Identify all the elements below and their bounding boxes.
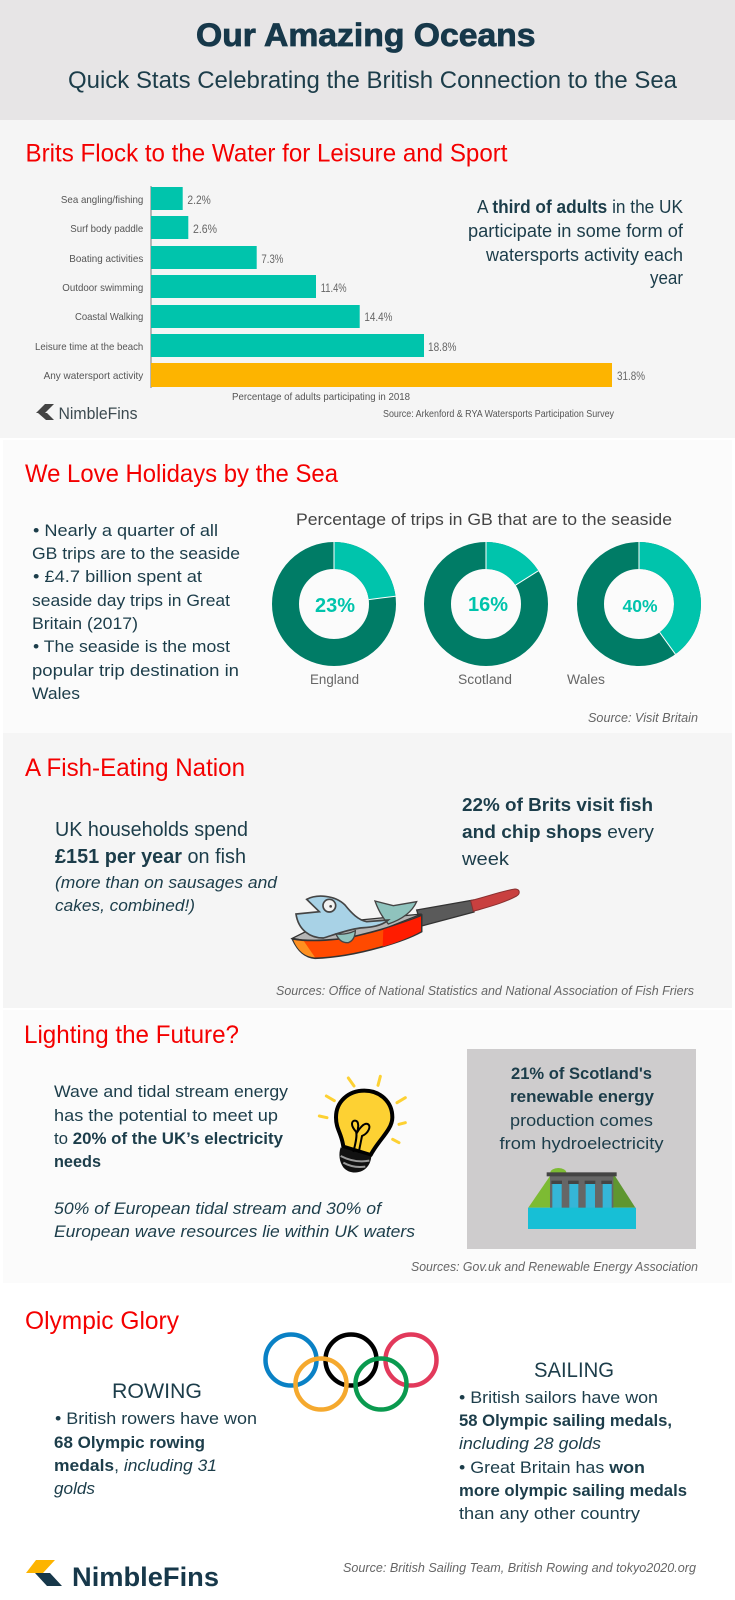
text: wave and tidal energy: European wave resources lie within UK waters (54, 1222, 416, 1241)
callout: a third of adults: participate in some form of (468, 221, 684, 241)
bar chart: Any watersport activity (44, 370, 144, 382)
callout box: hydroelectricity: 21% of Scotland's (511, 1064, 652, 1083)
bar chart: 7.3% (261, 254, 283, 266)
text: household spend: (more than on sausages and (55, 873, 278, 892)
donut chart: Wales (567, 542, 688, 687)
text: wave and tidal energy: needs (54, 1152, 101, 1171)
bullet list: Britain (2017) (32, 614, 138, 633)
text: wave and tidal energy: has the potential to meet up (54, 1106, 278, 1125)
bar chart: 11.4% (321, 283, 347, 295)
panel: lighting the future (3, 1010, 732, 1283)
bar chart (35, 186, 645, 403)
bullet list: popular trip destination in (32, 661, 239, 680)
bar chart: Coastal Walking (75, 311, 143, 323)
text: sailing: more olympic sailing medals (459, 1481, 687, 1500)
source: Sources: Gov.uk and Renewable Energy Association (411, 1260, 698, 1274)
bar chart: Surf body paddle (70, 223, 143, 235)
text: household spend: UK households spend (55, 819, 248, 841)
text: sailing: • Great Britain has won (459, 1458, 645, 1477)
text: rowing: ROWING (112, 1380, 202, 1403)
text: sailing: 58 Olympic sailing medals, (459, 1411, 672, 1430)
text: household spend: cakes, combined!) (55, 896, 195, 915)
heading: We Love Holidays by the Sea (25, 460, 338, 488)
heading: Olympic Glory (25, 1307, 179, 1335)
source: Source: Arkenford & RYA Watersports Participation Survey (383, 408, 615, 420)
donut chart: England (286, 542, 396, 687)
heading: A Fish-Eating Nation (25, 754, 245, 782)
bar chart: Sea angling/fishing (61, 194, 143, 206)
bar chart: 18.8% (428, 342, 456, 354)
bar chart: 2.6% (193, 224, 217, 236)
callout: a third of adults: watersports activity each (485, 245, 683, 265)
source: Sources: Office of National Statistics and National Association of Fish Friers (276, 984, 694, 998)
text: household spend (55, 819, 278, 915)
panel: olympic glory (25, 1307, 696, 1592)
text: sailing: • British sailors have won (459, 1388, 658, 1407)
callout box: hydroelectricity: production comes (510, 1111, 653, 1130)
text: rowing: 68 Olympic rowing (54, 1433, 205, 1452)
bullet list: • Nearly a quarter of all (33, 521, 218, 540)
logo: NimbleFins colour: NimbleFins (72, 1562, 219, 1592)
bar chart: Leisure time at the beach (35, 341, 143, 353)
donut chart: England: 23% (315, 595, 355, 617)
text: household spend: £151 per year on fish (55, 846, 246, 868)
text: rowing: medals, including 31 (54, 1456, 217, 1475)
icon: light bulb (319, 1076, 405, 1173)
bar chart: 2.2% (187, 195, 211, 207)
title: Our Amazing Oceans (196, 17, 536, 53)
text: sailing: SAILING (534, 1359, 614, 1382)
panel: holidays by the sea (3, 440, 732, 733)
bullet list: GB trips are to the seaside (32, 544, 240, 563)
heading: Brits Flock to the Water for Leisure and Sport (26, 140, 508, 168)
donut charts title: Percentage of trips in GB that are to the seaside (296, 510, 672, 529)
bullet list: • The seaside is the most (33, 637, 230, 656)
subtitle: Quick Stats Celebrating the British Connection to the Sea (68, 67, 678, 94)
callout box: hydroelectricity: renewable energy (510, 1087, 655, 1106)
text: fish and chip shops: and chip shops every (462, 821, 655, 842)
donut chart: Wales: Wales (567, 672, 605, 687)
callout: a third of adults: A third of adults in the UK (477, 197, 683, 217)
bullet list (32, 521, 240, 703)
callout: a third of adults: year (650, 268, 683, 288)
text: sailing (459, 1359, 687, 1523)
panel: leisure and sport (0, 120, 735, 438)
text: rowing: • British rowers have won (55, 1409, 257, 1428)
header panel (0, 0, 735, 120)
text: sailing: including 28 golds (459, 1434, 602, 1453)
text: fish and chip shops: week (461, 848, 510, 869)
text: wave and tidal energy (54, 1082, 416, 1241)
donut chart: Scotland: 16% (468, 594, 508, 616)
source: Source: Visit Britain (588, 711, 698, 725)
logo: NimbleFins grey: NimbleFins (58, 404, 138, 423)
text: fish and chip shops (461, 794, 655, 869)
source: Source: British Sailing Team, British Rowing and tokyo2020.org (343, 1561, 696, 1575)
callout box: hydroelectricity (467, 1049, 696, 1249)
text: wave and tidal energy: 50% of European tidal stream and 30% of (54, 1199, 383, 1218)
icon: olympic rings (266, 1334, 436, 1410)
text: rowing (54, 1380, 257, 1498)
heading: Lighting the Future? (24, 1021, 239, 1049)
bar chart: 31.8% (617, 371, 645, 383)
text: fish and chip shops: 22% of Brits visit fish (462, 794, 653, 815)
donut chart: Wales: 40% (622, 596, 658, 616)
callout: a third of adults (468, 197, 684, 288)
icon: fish in frying pan (292, 889, 519, 958)
callout box: hydroelectricity: from hydroelectricity (500, 1134, 664, 1153)
panel: fish-eating nation (3, 733, 732, 1008)
bullet list: seaside day trips in Great (32, 591, 230, 610)
bullet list: • £4.7 billion spent at (33, 567, 202, 586)
bar chart: Percentage of adults participating in 2018 (232, 391, 410, 403)
bar chart: Boating activities (69, 253, 143, 265)
text: rowing: golds (54, 1479, 96, 1498)
icon: hydroelectric dam (528, 1168, 636, 1229)
text: wave and tidal energy: to 20% of the UK’s electricity (54, 1129, 284, 1148)
bar chart: Outdoor swimming (62, 282, 143, 294)
donut chart: Scotland: Scotland (458, 672, 512, 687)
bullet list: Wales (32, 684, 80, 703)
bar chart: 14.4% (364, 312, 392, 324)
donut chart: England: England (310, 672, 359, 687)
text: sailing: than any other country (459, 1504, 641, 1523)
donut chart: Scotland (438, 542, 538, 687)
text: wave and tidal energy: Wave and tidal stream energy (54, 1082, 289, 1101)
